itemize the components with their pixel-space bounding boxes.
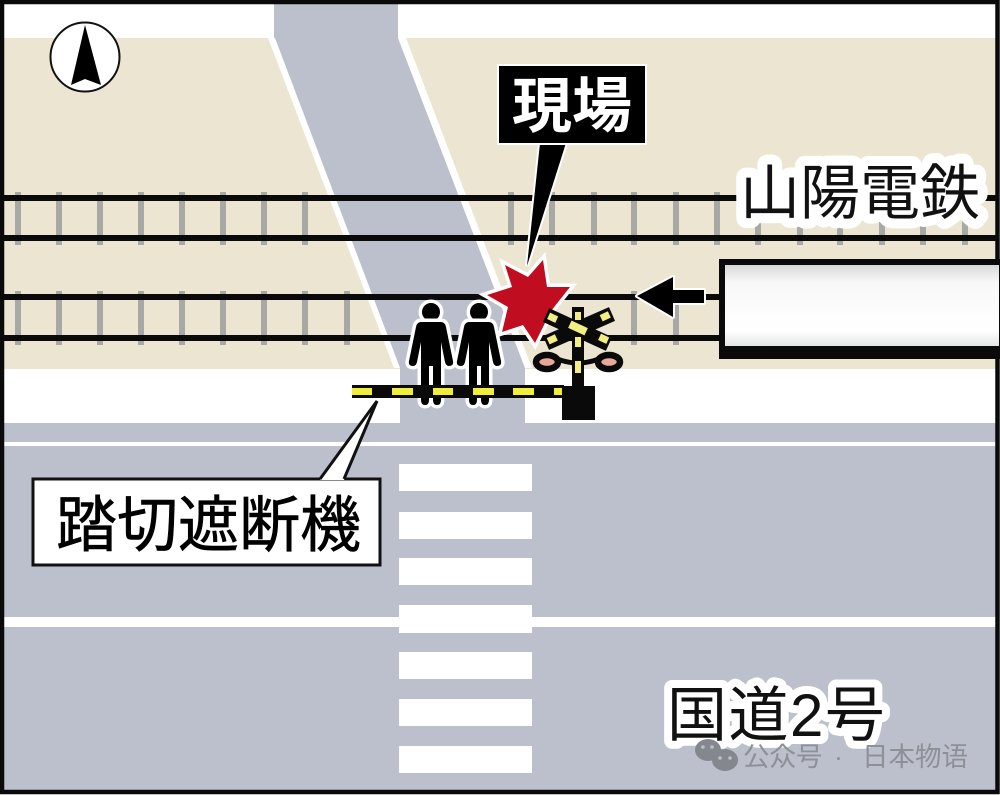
person left (409, 303, 453, 405)
watermark text: 公众号 (743, 742, 822, 772)
label: railway name: 山陽電鉄 (740, 160, 980, 227)
panel: beige ground (4, 38, 996, 369)
callout: crossing barrier label: 踏切遮断機 (56, 491, 361, 559)
crossing barrier (352, 385, 564, 398)
icon: north compass (50, 22, 120, 92)
watermark text: 日本物语 (862, 742, 968, 772)
train (719, 262, 1000, 359)
railway sleepers (18, 192, 965, 345)
icon: red accident star (487, 260, 570, 343)
callout: crossing barrier label (33, 401, 380, 565)
label: national route 2: 国道2号 (667, 682, 886, 749)
icon: wechat watermark (695, 739, 738, 771)
arrow: train direction (637, 277, 720, 317)
callout: scene (499, 66, 645, 266)
pedestrian crossing stripes (399, 464, 532, 773)
railway rails (4, 195, 996, 341)
person right (457, 303, 501, 405)
watermark text: · (834, 742, 843, 772)
road lane lines (4, 442, 996, 627)
national road surface (4, 423, 996, 792)
crossing signal (536, 307, 620, 420)
callout: scene: 現場 (512, 73, 632, 140)
watermark text (743, 742, 968, 772)
side road crossing the tracks (268, 4, 532, 424)
